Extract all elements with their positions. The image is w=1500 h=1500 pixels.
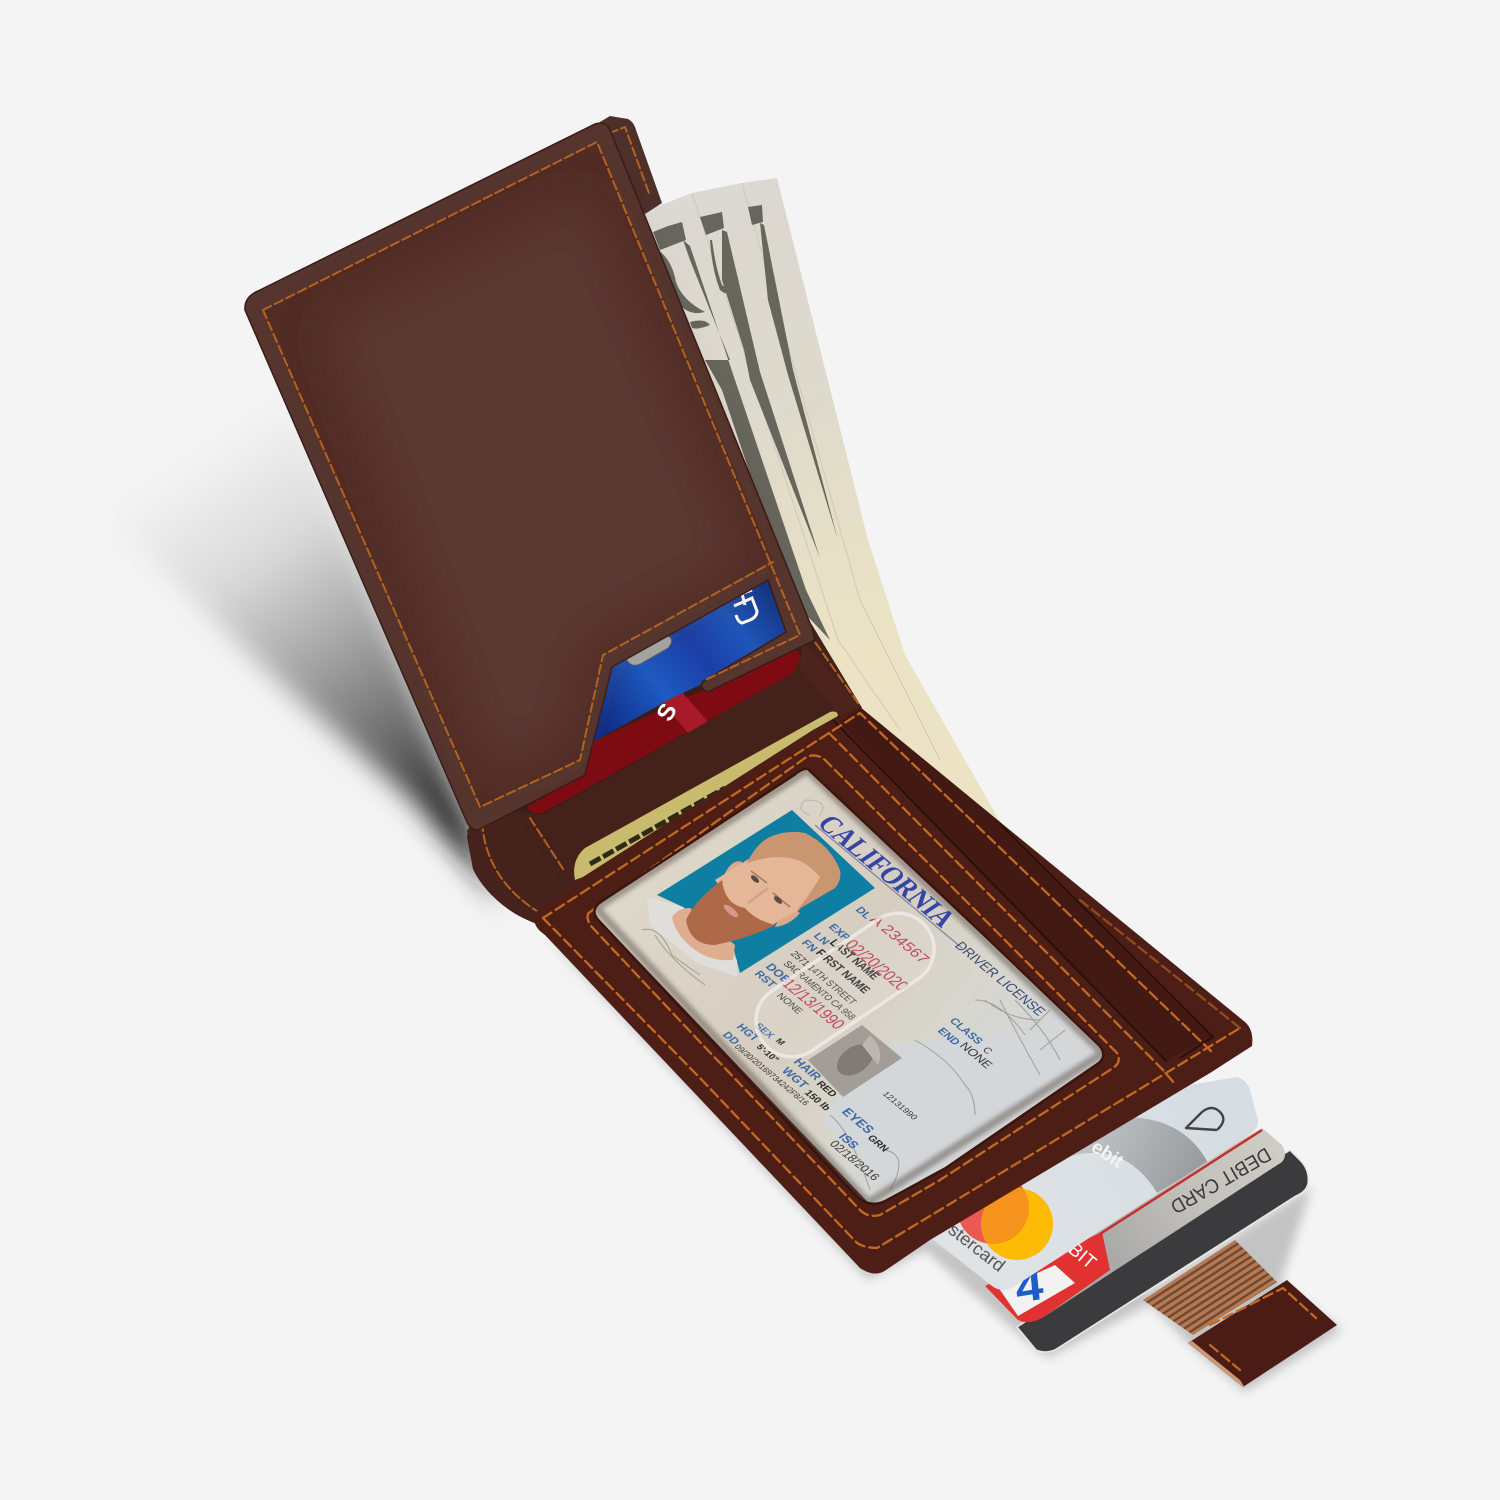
flap panel sheen [325, 195, 745, 770]
license text: LN [811, 931, 832, 947]
license portrait [647, 810, 875, 977]
debit card logo box [1000, 1265, 1075, 1316]
interior base and hinge [467, 565, 862, 925]
portrait neck [672, 908, 735, 960]
gold card pattern [590, 788, 725, 864]
contact shadow under lower wallet and cards [545, 935, 1342, 1392]
leather pull tab [1188, 1280, 1337, 1388]
license text: NONE [957, 1040, 996, 1071]
portrait hair [747, 832, 840, 910]
license text: 12/13/1990 [778, 976, 849, 1032]
license text: EXP [826, 922, 852, 943]
debit card red lettering: BIT [1064, 1239, 1100, 1274]
license text: 150 lb [802, 1089, 832, 1113]
back panel of upper flap [595, 116, 662, 214]
license text: SACRAMENTO CA 958 [781, 960, 858, 1022]
license text: DOB [763, 961, 795, 986]
slot seam lines [833, 720, 1213, 1062]
license text: NONE [774, 992, 805, 1016]
license text: M [773, 1037, 787, 1047]
license text: DRIVER LICENSE [952, 939, 1050, 1018]
license text: END [935, 1026, 962, 1048]
debit card [985, 1128, 1285, 1322]
license ghost portrait [808, 1025, 902, 1097]
license text: SEX [752, 1022, 776, 1041]
card pointed logo [1186, 1108, 1223, 1130]
lower wallet body [534, 707, 1252, 1274]
portrait eyes, brows and lips [722, 871, 790, 919]
card slot layers [840, 707, 1213, 1060]
license security lines [642, 800, 1065, 1190]
card swoosh [1067, 1117, 1208, 1193]
license text: CALIFORNIA [810, 810, 962, 932]
blue card [593, 580, 790, 742]
cast shadow of raised flap [90, 300, 500, 905]
debit card red edge [1100, 1130, 1262, 1234]
license text: 12131990 [880, 1090, 920, 1122]
license text: RST [752, 969, 779, 990]
portrait beard [686, 880, 775, 945]
license text: 5'-10" [754, 1043, 781, 1064]
license text: HAIR [791, 1056, 825, 1083]
license text: GRN [865, 1134, 891, 1154]
license text: 2571 14TH STREET [788, 950, 858, 1007]
gold card [574, 712, 838, 880]
debit card red band [985, 1232, 1110, 1322]
card debit word: ebit [1087, 1137, 1128, 1173]
portrait ears [723, 861, 800, 927]
upper flap [245, 123, 815, 830]
chip [626, 636, 672, 665]
license text: A 234567 [866, 913, 933, 966]
license text: DD [720, 1030, 742, 1047]
license text [720, 810, 1050, 1183]
license text: CLASS [947, 1016, 985, 1046]
license text: C [980, 1046, 994, 1056]
flap inner panel [263, 142, 773, 807]
banknote edge lines [692, 183, 940, 760]
wallet illustration [150, 116, 1342, 1394]
black card [1017, 1150, 1308, 1352]
red card [527, 648, 800, 813]
hinge fold [467, 810, 575, 925]
license text: FIRST NAME [813, 947, 873, 996]
window edge shading [596, 770, 1103, 1203]
debit card label: DEBIT CARD [1167, 1143, 1275, 1218]
wallet stitching [543, 713, 1240, 1248]
license text: RED [814, 1080, 839, 1099]
blue card logo [733, 590, 757, 623]
license text: 02/20/2020 [841, 937, 913, 994]
license text: WGT [779, 1065, 812, 1091]
card word: stercard [945, 1219, 1009, 1276]
portrait face [715, 857, 820, 924]
mastercard logo [960, 1186, 1053, 1260]
license text: ISS [836, 1131, 862, 1151]
license text: HGT [734, 1022, 762, 1044]
license lower dotted tint [820, 1038, 968, 1193]
red card lettering: S [651, 699, 683, 726]
lower pull strap [1143, 1240, 1337, 1388]
license text: FN [799, 938, 820, 954]
inner leather pocket [510, 625, 862, 892]
California driver license [590, 765, 1112, 1215]
license text: LAST NAME [827, 937, 883, 982]
ID window rim [596, 770, 1102, 1203]
banknotes [643, 178, 1002, 825]
debit card digit: 4 [1013, 1258, 1045, 1312]
license text: DL [853, 905, 874, 921]
portrait shirt [647, 897, 737, 977]
license text: 02/18/2016 [827, 1138, 883, 1183]
flap stitching [263, 142, 800, 807]
hologram oval [754, 912, 936, 1058]
silver mastercard debit card [930, 1077, 1258, 1290]
license text: 09/30/20169734242F8/16 [732, 1043, 812, 1107]
license text: EYES [839, 1105, 878, 1136]
portrait blue backdrop [657, 810, 875, 973]
banknote engraving [653, 205, 838, 640]
